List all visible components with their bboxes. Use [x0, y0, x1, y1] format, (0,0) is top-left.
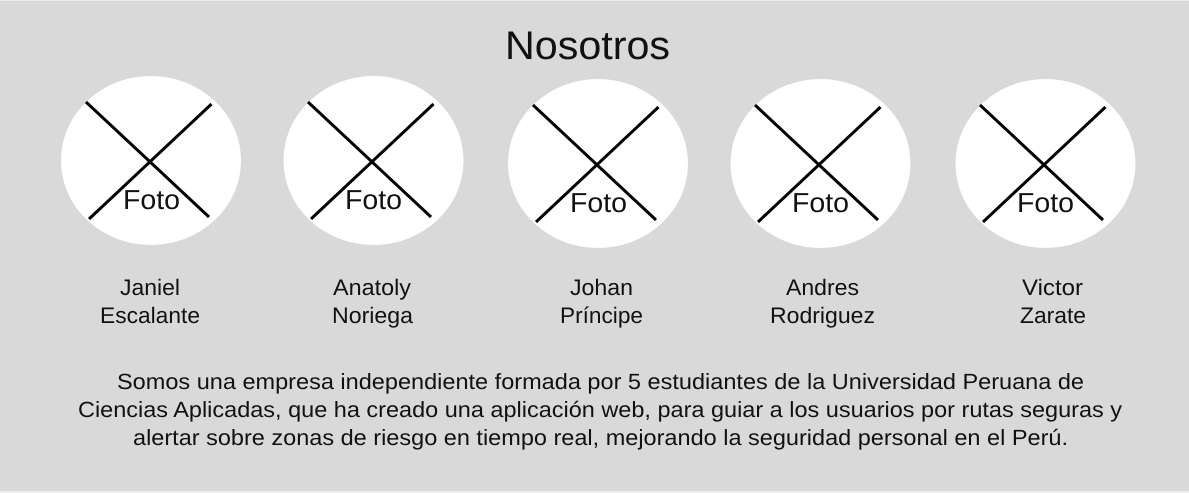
name: Victor Zarate [1020, 275, 1086, 328]
name: Johan Príncipe: Johan [570, 275, 633, 300]
name: Andres Rodriguez: Andres [786, 275, 859, 300]
photo placeholder: Johan: Foto [570, 187, 627, 218]
name: Andres Rodriguez: Rodriguez [770, 303, 875, 328]
name: Victor Zarate: Zarate [1020, 303, 1086, 328]
name: Janiel Escalante [100, 275, 200, 328]
photo placeholder: Johan [508, 79, 688, 248]
name: Anatoly Noriega [332, 275, 413, 328]
photo placeholder: Janiel: Foto [123, 184, 180, 215]
title: Nosotros [505, 24, 670, 68]
description paragraph [78, 369, 1122, 450]
name: Janiel Escalante: Janiel [120, 275, 180, 300]
description paragraph: Ciencias Aplicadas, que ha creado una aplicación web, para guiar a los usuarios por rutas seguras y [78, 397, 1122, 422]
photo placeholder: Janiel [61, 76, 241, 245]
photo placeholder: Andres [730, 79, 910, 248]
name: Anatoly Noriega: Noriega [332, 303, 413, 328]
description paragraph: Somos una empresa independiente formada por 5 estudiantes de la Universidad Peruana de [117, 369, 1084, 394]
photo placeholder: Anatoly [284, 76, 464, 245]
name: Andres Rodriguez [770, 275, 875, 328]
photo placeholder: Anatoly: Foto [345, 184, 402, 215]
name: Johan Príncipe [560, 275, 643, 328]
photo placeholder: Victor [956, 79, 1136, 248]
name: Anatoly Noriega: Anatoly [333, 275, 412, 300]
photo placeholder: Andres: Foto [792, 187, 849, 218]
name: Victor Zarate: Victor [1022, 275, 1084, 300]
name: Janiel Escalante: Escalante [100, 303, 200, 328]
photo placeholder: Victor: Foto [1017, 187, 1074, 218]
name: Johan Príncipe: Príncipe [560, 303, 643, 328]
description paragraph: alertar sobre zonas de riesgo en tiempo real, mejorando la seguridad personal en el Perú. [133, 425, 1068, 450]
